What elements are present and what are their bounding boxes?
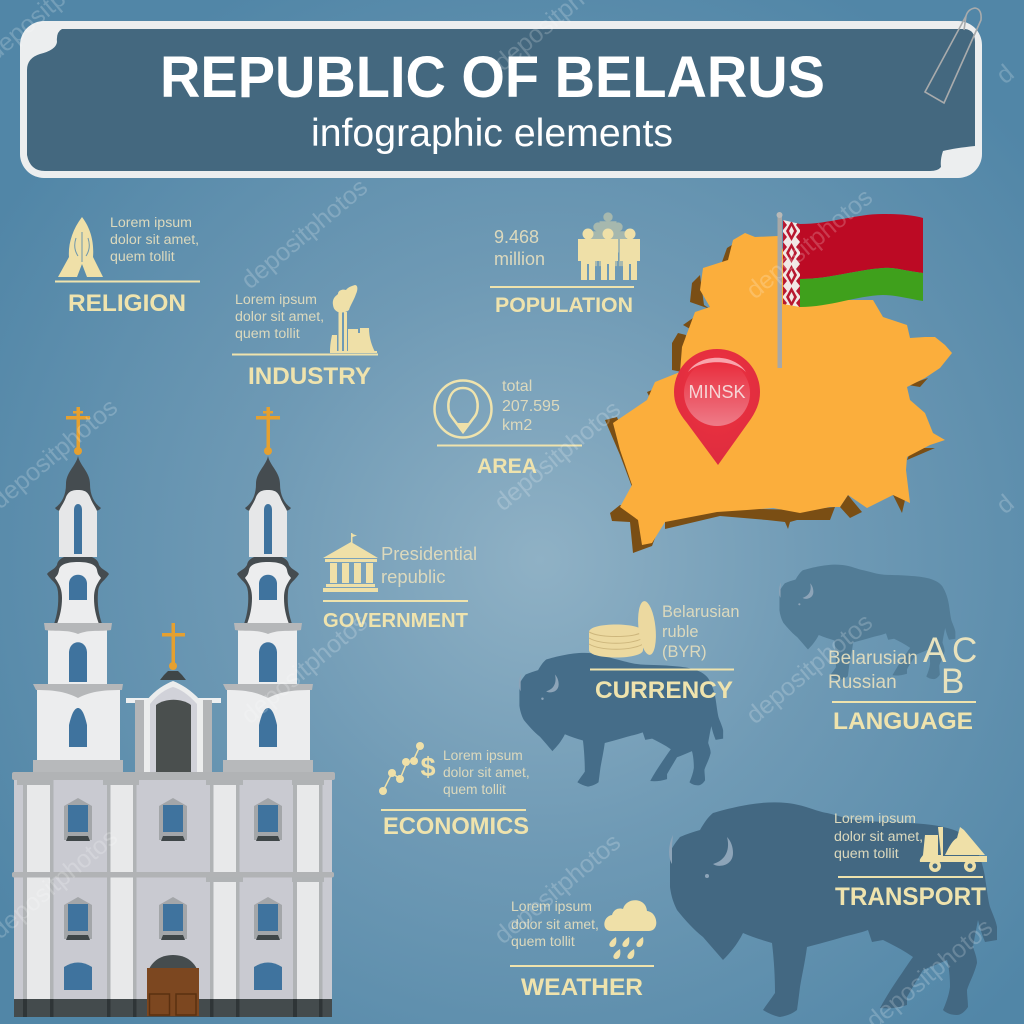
government rule [323, 600, 468, 602]
map body [613, 233, 952, 545]
industry text: quem tollit [235, 326, 300, 342]
transport label: TRANSPORT [835, 883, 986, 911]
watermarks: d [991, 59, 1020, 90]
watermarks: depositphotos [236, 173, 373, 295]
section: transport [834, 811, 987, 911]
pin highlight [688, 358, 746, 372]
currency text [662, 603, 739, 661]
watermarks: d [991, 489, 1020, 520]
door [147, 955, 199, 1016]
language text: Russian [828, 672, 897, 693]
icon: growth chart and dollar: $ [420, 752, 436, 782]
industry text: Lorem ipsum [235, 292, 317, 308]
language rule [832, 701, 976, 703]
flag pole finial [776, 212, 782, 218]
language label: LANGUAGE [833, 708, 973, 735]
weather text [511, 898, 599, 949]
currency text: ruble [662, 623, 698, 641]
language text [828, 648, 918, 693]
right tower [223, 407, 313, 772]
banner frame [20, 21, 982, 178]
map of Belarus [605, 233, 952, 553]
government text: Presidential [381, 543, 477, 564]
pin lens [684, 360, 750, 426]
area rule [437, 444, 582, 446]
area label: AREA [477, 455, 537, 478]
subtitle: infographic elements [311, 112, 673, 155]
bison silhouette upper right [779, 565, 955, 680]
economics label: ECONOMICS [383, 814, 529, 840]
middle windows [64, 897, 282, 940]
bison silhouette large [669, 802, 997, 1017]
flag pole [778, 216, 782, 368]
population text: 9.468 [494, 227, 539, 247]
icon: letters ABC [923, 631, 977, 701]
population label: POPULATION [495, 294, 633, 317]
religion rule [55, 280, 200, 282]
banner panel [27, 29, 975, 171]
transport text: Lorem ipsum [834, 811, 916, 827]
watermarks: depositphotos [741, 608, 878, 730]
icon: growth chart and dollar [379, 742, 436, 795]
transport text [834, 811, 923, 862]
section: population [490, 212, 640, 317]
population text [494, 227, 545, 269]
section: economics [379, 742, 530, 840]
icon: coins [589, 600, 658, 658]
transport text: dolor sit amet, [834, 829, 923, 845]
main wall [14, 780, 332, 1000]
government text: republic [381, 566, 445, 587]
currency text: (BYR) [662, 643, 707, 661]
religion text [110, 215, 199, 265]
section: currency [589, 600, 739, 704]
upper windows [64, 798, 282, 841]
weather text: Lorem ipsum [511, 898, 592, 914]
plinth [14, 999, 332, 1017]
icon: letters ABC: A [923, 631, 947, 670]
area text [502, 378, 560, 434]
government text [381, 543, 477, 587]
religion text: dolor sit amet, [110, 232, 199, 248]
language text: Belarusian [828, 648, 918, 669]
watermarks: depositphotos [741, 183, 878, 305]
bison silhouette middle [519, 653, 723, 787]
pin label: MINSK [688, 382, 746, 402]
weather label: WEATHER [521, 974, 643, 1001]
section: area [434, 378, 582, 478]
area text: 207.595 [502, 398, 560, 415]
industry rule [232, 354, 378, 356]
central gable [126, 623, 221, 772]
currency label: CURRENCY [595, 677, 733, 704]
pin body [674, 349, 760, 465]
pilasters [17, 780, 324, 1000]
title: REPUBLIC OF BELARUS [160, 45, 825, 110]
weather rule [510, 965, 654, 967]
flag [776, 212, 923, 368]
area text: total [502, 378, 532, 395]
watermarks: depositphotos [236, 608, 373, 730]
icon: rain cloud [604, 900, 656, 959]
section: weather [510, 898, 656, 1001]
section: government [323, 533, 477, 632]
section: language [828, 631, 977, 735]
section: industry [232, 285, 378, 390]
icon: praying hands [58, 217, 103, 277]
religion label: RELIGION [68, 290, 186, 317]
banner [20, 8, 982, 178]
religion text: Lorem ipsum [110, 215, 192, 231]
icon: location circle [434, 380, 492, 438]
economics rule [381, 809, 526, 811]
watermarks: depositphotos [489, 828, 626, 950]
plinth pilaster marks [23, 999, 322, 1017]
light wall panels [27, 785, 319, 999]
weather text: dolor sit amet, [511, 916, 599, 932]
economics text: dolor sit amet, [443, 765, 530, 780]
icon: government building [323, 533, 378, 592]
map shadow [605, 243, 935, 553]
icon: letters ABC: C [952, 631, 977, 670]
watermarks: depositphotos [489, 395, 626, 517]
currency text: Belarusian [662, 603, 739, 621]
religion text: quem tollit [110, 249, 175, 265]
section: religion [55, 215, 200, 317]
economics text: Lorem ipsum [443, 748, 523, 763]
church [12, 407, 335, 1017]
pin: Minsk [674, 349, 760, 465]
transport text: quem tollit [834, 846, 899, 862]
industry text [235, 292, 324, 342]
industry text: dolor sit amet, [235, 309, 324, 325]
icon: factory [330, 285, 377, 353]
economics text [443, 748, 530, 797]
industry label: INDUSTRY [248, 363, 371, 390]
left tower [33, 407, 123, 772]
cornices [12, 772, 335, 878]
icon: letters ABC: B [941, 662, 964, 701]
lower windows [64, 962, 282, 990]
paperclip [925, 8, 981, 103]
government label: GOVERNMENT [323, 610, 469, 632]
flag red stripe [800, 214, 923, 279]
flag ornament strip [783, 220, 800, 307]
population text: million [494, 249, 545, 269]
economics text: quem tollit [443, 782, 506, 797]
population rule [490, 286, 634, 288]
flag green stripe [800, 268, 923, 307]
weather text: quem tollit [511, 933, 575, 949]
area text: km2 [502, 417, 532, 434]
currency rule [590, 668, 734, 670]
icon: dump truck [920, 827, 987, 872]
icon: people [578, 212, 640, 280]
transport rule [838, 876, 983, 878]
